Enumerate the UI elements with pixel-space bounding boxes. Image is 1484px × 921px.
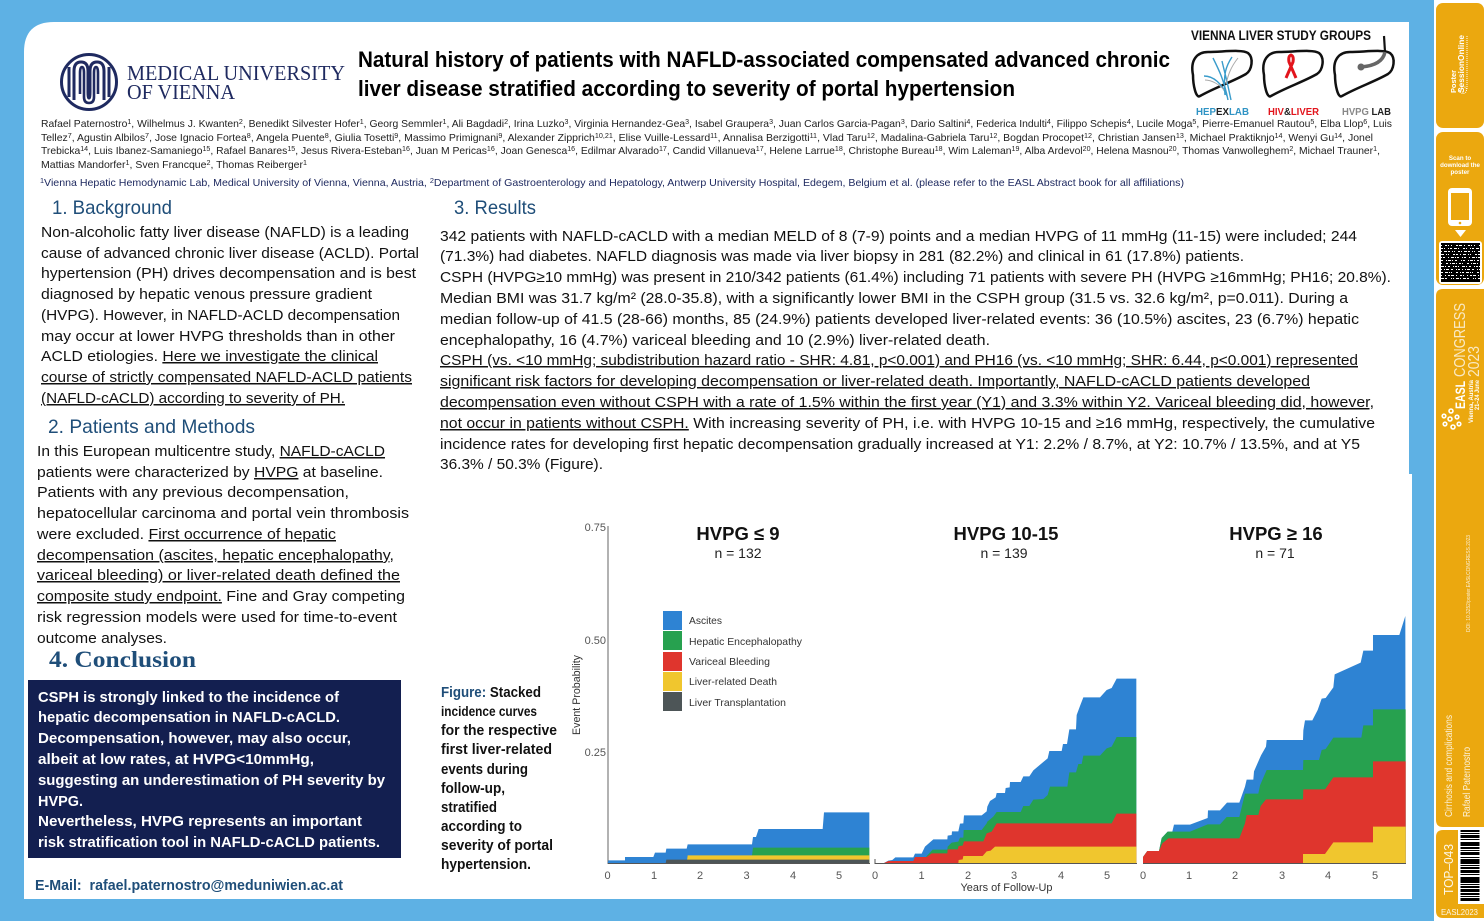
chart panel: HVPG ≥ 16 <box>1140 523 1406 882</box>
sidebar panel: scan to download <box>1436 132 1484 285</box>
panel: conclusion: Nevertheless, HVPG represents an important <box>38 813 362 830</box>
figure caption: stratified <box>441 800 497 816</box>
icon: HEPEXLAB liver <box>1192 51 1252 118</box>
figure caption: incidence curves <box>441 703 537 719</box>
text block: background: Non-alcoholic fatty liver disease (NAFLD) is a leading <box>41 224 409 241</box>
sidebar panel: scan to download: Scan to <box>1449 155 1471 162</box>
chart panel: HVPG 10-15: Years of Follow-Up <box>960 882 1052 894</box>
icon: HVPG LAB liver with catheter <box>1334 36 1394 118</box>
text block: background: hypertension (PH) drives decompensation and is best <box>41 265 417 282</box>
chart panel: HVPG 10-15: 4 <box>1058 870 1064 882</box>
figure caption: first liver-related <box>441 742 552 758</box>
text block: results: not occur in patients without CSPH. With increasing severity of PH, i.e. with HVPG 10-15 and ≥16 mmHg, respectively, the cumulative <box>440 415 1375 432</box>
text block: patients and methods <box>36 443 409 647</box>
chart panel: HVPG 10-15: n = 139 <box>980 545 1028 561</box>
text block: patients and methods: hepatocellular carcinoma and portal vein thrombosis <box>37 505 409 522</box>
sidebar panel: scan to download: poster <box>1451 169 1470 176</box>
chart panel: HVPG ≥ 16: HVPG ≥ 16 <box>1229 523 1323 544</box>
chart panel: HVPG ≥ 16: 0 <box>1140 870 1146 882</box>
panel: conclusion: HVPG. <box>38 793 83 810</box>
logo: Medical University of Vienna: MEDICAL UNIVERSITY <box>127 61 345 85</box>
chart panel: HVPG ≤ 9: n = 132 <box>714 545 762 561</box>
text block: results <box>440 228 1391 473</box>
text block: patients and methods: composite study endpoint. Fine and Gray competing <box>37 588 405 605</box>
chart panel: HVPG ≥ 16: 5 <box>1372 870 1378 882</box>
panel: conclusion: albeit at low rates, at HVPG<10mmHg, <box>38 751 314 768</box>
logo: Medical University of Vienna: OF VIENNA <box>127 80 236 104</box>
text block: patients and methods: In this European multicentre study, NAFLD-cACLD <box>37 443 385 460</box>
text block: results: Median BMI was 31.7 kg/m² (28.0-35.8), with a significantly lower BMI in the CSPH group (31.5 vs. 32.6 kg/m², p=0.011). During a <box>440 290 1349 307</box>
text block: results: CSPH (vs. <10 mmHg; subdistribution hazard ratio - SHR: 4.81, p<0.001) and PH16 (vs. <10 mmHg; SHR: 6.44, p<0.001) represented <box>440 352 1358 369</box>
sidebar panel: poster sessions online: SessionOnline <box>1457 34 1466 93</box>
figure caption: for the respective <box>441 723 557 739</box>
chart panel: HVPG 10-15: 1 <box>918 870 925 882</box>
chart panel: HVPG ≥ 16: 3 <box>1279 870 1285 882</box>
chart panel: HVPG ≤ 9 <box>604 523 870 882</box>
chart panel: HVPG 10-15 <box>872 523 1137 894</box>
chart panel: HVPG ≤ 9: 1 <box>651 870 657 882</box>
text block: results: significant risk factors for developing decompensation or liver-related death. Importantly, NAFLD-cACLD patients developed <box>440 373 1310 390</box>
figure caption: according to <box>441 819 522 835</box>
text block: background: (NAFLD-cACLD) according to severity of PH. <box>41 390 345 407</box>
chart panel: HVPG ≤ 9: HVPG ≤ 9 <box>696 523 780 544</box>
figure caption <box>441 685 557 873</box>
chart panel: HVPG 10-15: 2 <box>965 870 971 882</box>
text block: results: incidence rates for developing first hepatic decompensation gradually increased at Y1: 2.2% / 8.7%, at Y2: 10.7% / 13.5%, and at Y5 <box>440 436 1360 453</box>
text block: patients and methods: patients were characterized by HVPG at baseline. <box>37 464 383 481</box>
text block: background: ACLD etiologies. Here we investigate the clinical <box>41 348 378 365</box>
authors: Trebicka14, Luis Ibanez-Samaniego15, Rafael Banares15, Jesus Rivera-Esteban16, Juan M Pericas16, Joan Genesca16, Edilmar Alvarado17, Candid Villanueva17, Helene Larrue18, Christophe Bureau18, Wim Laleman19, Alba Ardevol20, Helena Masnou20, Thomas Vanwolleghem2, Michael Trauner1, <box>41 146 1380 157</box>
email: E-Mail: rafael.paternostro@meduniwien.ac.at <box>35 878 343 894</box>
sidebar panel: poster ID and barcode: EASL2023 <box>1441 908 1479 917</box>
sidebar panel: poster sessions online: Poster <box>1449 70 1458 93</box>
chart panel: HVPG ≤ 9: 3 <box>743 870 750 882</box>
sidebar panel: EASL congress: Vienna, Austria <box>1469 379 1475 423</box>
sidebar panel: EASL congress: CONGRESS <box>1452 303 1469 377</box>
text block: patients and methods: outcome analyses. <box>37 630 167 647</box>
authors: Rafael Paternostro1, Wilhelmus J. Kwanten2, Benedikt Silvester Hofer 1, Georg Semmler1, Ali Bagdadi2, Irina Luzko3, Virginia Hernandez-Gea 3, Isabel Graupera3, Juan Carlos Garcia-Pagan 3, Dario Saltini4, Federica Indulti4, Filippo Schepis4, Lucile Moga5, Pierre-Emanuel Rautou 5, Elba Llop6, Luis <box>41 118 1392 130</box>
y axis: 0.25 <box>585 747 606 759</box>
sidebar panel: EASL congress: Rafael Paternostro <box>1461 747 1473 817</box>
legend: Ascites <box>689 615 722 627</box>
sidebar panel: EASL congress: DOI: 10.3252/poster.EASLCONGRESS.2023 <box>1466 535 1472 632</box>
text block: background: course of strictly compensated NAFLD-ACLD patients <box>41 369 412 386</box>
heading: 4. Conclusion: 4. Conclusion <box>49 647 196 672</box>
text block: results: decompensation even without CSPH with a rate of 1.5% within the first year (Y1) and 3.3% within Y2. Variceal bleeding did, however, <box>440 394 1374 411</box>
sidebar panel: EASL congress: 2023 <box>1466 346 1483 377</box>
sidebar panel: scan to download: download the <box>1440 162 1480 169</box>
y axis: 0.75 <box>585 522 606 534</box>
text block: patients and methods: variceal bleeding) or liver-related death defined the <box>37 567 400 584</box>
figure caption: events during <box>441 762 528 778</box>
legend: Liver Transplantation <box>689 697 786 709</box>
text block: results: encephalopathy, 16 (4.7%) variceal bleeding and 10 (2.9%) liver-related death. <box>440 332 990 349</box>
icon: HVPG LAB liver with catheter: HVPG LAB <box>1342 106 1391 118</box>
chart panel: HVPG ≤ 9: 5 <box>836 870 842 882</box>
text block: patients and methods: Patients with any previous decompensation, <box>37 484 349 501</box>
text block: results: median follow-up of 41.5 (28-66) months, 85 (24.9%) patients developed liver-related events: 36 (10.5%) ascites, 23 (6.7%) hepatic <box>440 311 1360 328</box>
text block: background: may occur at lower HVPG thresholds than in other <box>41 328 395 345</box>
sidebar panel: EASL congress: EASL <box>1453 381 1468 409</box>
chart panel: HVPG 10-15: 0 <box>872 870 878 882</box>
text block: results: CSPH (HVPG≥10 mmHg) was present in 210/342 patients (61.4%) including 71 patients with severe PH (HVPG ≥16mmHg; PH16; 20.8%). <box>440 269 1391 286</box>
chart panel: HVPG ≤ 9: 0 <box>604 870 611 882</box>
text block: patients and methods: were excluded. First occurrence of hepatic <box>36 526 337 543</box>
sidebar panel: poster ID and barcode <box>1436 830 1484 918</box>
affiliations: 1Vienna Hepatic Hemodynamic Lab, Medical University of Vienna, Vienna, Austria, 2Department of Gastroenterology and Hepatology, Antwerp University Hospital, Edegem, Belgium et al. (please refer to the EASL Abstract book for all affiliations) <box>40 178 1184 189</box>
chart panel: HVPG ≤ 9: 2 <box>697 870 703 882</box>
chart panel: HVPG 10-15: 3 <box>1011 870 1017 882</box>
sidebar panel: EASL congress: 21–24 June <box>1475 379 1481 410</box>
figure caption: Figure: Stacked <box>441 685 541 701</box>
panel: conclusion: suggesting an underestimation of PH severity by <box>38 772 386 789</box>
text block: patients and methods: decompensation (ascites, hepatic encephalopathy, <box>37 547 394 564</box>
sidebar panel: poster sessions online <box>1436 3 1484 128</box>
sidebar panel: EASL congress: Cirrhosis and complications <box>1443 715 1455 817</box>
chart panel: HVPG ≥ 16: 4 <box>1325 870 1331 882</box>
chart: stacked incidence curves <box>571 522 1406 894</box>
title: liver disease stratified according to severity of portal hypertension <box>358 76 1015 101</box>
chart panel: HVPG 10-15: 5 <box>1104 870 1110 882</box>
icon: QR code <box>1439 241 1482 284</box>
sidebar panel: poster ID and barcode: TOP–043 <box>1441 844 1456 895</box>
figure caption: follow-up, <box>441 781 505 797</box>
text block: results: 342 patients with NAFLD-cACLD with a median MELD of 8 (7-9) points and a median HVPG of 11 mmHg (11-15) were included; 244 <box>440 228 1357 245</box>
authors: Mattias Mandorfer 1, Sven Francque 2, Thomas Reiberger 1 <box>41 160 307 171</box>
logo: Medical University of Vienna <box>62 54 345 110</box>
text block: background: (HVPG). However, in NAFLD-ACLD decompensation <box>41 307 400 324</box>
chart panel: HVPG ≥ 16: 2 <box>1232 870 1238 882</box>
chart panel: HVPG ≥ 16: 1 <box>1186 870 1192 882</box>
panel: conclusion: CSPH is strongly linked to the incidence of <box>38 689 340 706</box>
study group logos: VIENNA LIVER STUDY GROUPS <box>1191 28 1371 43</box>
legend: Hepatic Encephalopathy <box>689 636 803 648</box>
legend: Liver-related Death <box>689 676 777 688</box>
icon: EASL flower <box>1442 409 1461 429</box>
text block: background: diagnosed by hepatic venous pressure gradient <box>41 286 373 303</box>
chart panel: HVPG ≥ 16: n = 71 <box>1255 545 1295 561</box>
text block: background <box>41 224 419 407</box>
chart panel: HVPG 10-15: HVPG 10-15 <box>954 523 1058 544</box>
heading: 1. Background: 1. Background <box>52 197 172 219</box>
text block: results: 36.3% / 50.3% (Figure). <box>440 456 603 473</box>
icon: HEPEXLAB liver: HEPEXLAB <box>1196 106 1249 118</box>
title <box>358 47 1170 101</box>
y axis <box>571 522 608 864</box>
legend <box>663 611 803 711</box>
panel: conclusion: hepatic decompensation in NAFLD-cACLD. <box>38 709 340 726</box>
heading: 2. Patients and Methods: 2. Patients and Methods <box>48 416 255 438</box>
icon: HIV&LIVER liver with ribbon <box>1263 51 1323 118</box>
y axis: 0.50 <box>585 635 606 647</box>
panel: conclusion <box>28 680 401 858</box>
icon: phone <box>1448 188 1472 237</box>
y axis: Event Probability <box>571 655 583 735</box>
title: Natural history of patients with NAFLD-associated compensated advanced chronic <box>358 47 1170 72</box>
panel: conclusion: Decompensation, however, may also occur, <box>38 730 351 747</box>
sidebar panel: EASL congress <box>1436 289 1484 827</box>
authors <box>41 118 1392 171</box>
figure caption: severity of portal <box>441 838 553 854</box>
heading: 3. Results: 3. Results <box>454 197 536 219</box>
legend: Variceal Bleeding <box>689 656 770 668</box>
text block: patients and methods: risk regression models were used for time-to-event <box>37 609 398 626</box>
study group logos <box>1191 28 1394 118</box>
panel: conclusion: risk stratification tool in NAFLD-cACLD patients. <box>38 834 380 851</box>
figure caption: hypertension. <box>441 857 531 873</box>
text block: results: (71.3%) had diabetes. NAFLD diagnosis was made via liver biopsy in 281 (82.2%) and clinical in 61 (17.8%) patients. <box>440 248 1244 265</box>
text block: background: cause of advanced chronic liver disease (ACLD). Portal <box>41 245 419 262</box>
chart panel: HVPG ≤ 9: 4 <box>790 870 796 882</box>
icon: HIV&LIVER liver with ribbon: HIV&LIVER <box>1268 106 1319 118</box>
authors: Tellez7, Agustin Albilos 7, Jose Ignacio Fortea 8, Angela Puente 8, Giulia Tosetti9, Massimo Primignani 9, Alexander Zipprich 10,21, Elise Vuille-Lessard 11, Annalisa Berzigotti 11, Vlad Taru12, Madalina-Gabriela Taru 12, Bogdan Procopet 12, Christian Jansen 13, Michael Praktiknjo 14, Wenyi Gu14, Jonel <box>41 132 1373 144</box>
